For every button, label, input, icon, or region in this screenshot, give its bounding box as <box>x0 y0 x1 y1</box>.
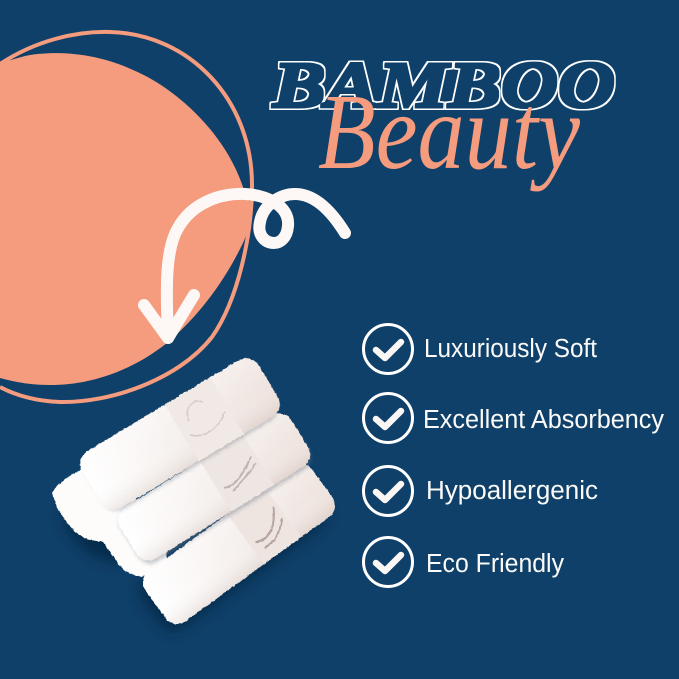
title: Beauty: Beauty <box>318 73 580 192</box>
looping arrow pointing to towels <box>144 194 345 338</box>
benefit: Hypoallergenic: Hypoallergenic <box>426 477 598 505</box>
benefit: Luxuriously Soft <box>364 324 597 374</box>
middle towel <box>112 408 316 566</box>
benefit: Excellent Absorbency <box>364 394 664 442</box>
benefit list <box>364 324 664 586</box>
title: BAMBOO: BAMBOO <box>272 49 615 122</box>
towel shadow <box>51 469 332 637</box>
benefit: Eco Friendly <box>364 538 564 586</box>
peach circle outline <box>0 32 252 402</box>
benefit: Eco Friendly: Eco Friendly <box>426 550 564 578</box>
top towel shadow <box>78 356 283 516</box>
bottom towel <box>137 458 341 630</box>
benefit: Excellent Absorbency: Excellent Absorbency <box>423 406 664 434</box>
benefit: Hypoallergenic <box>364 466 598 516</box>
benefit: Luxuriously Soft: Luxuriously Soft <box>424 335 597 363</box>
back towel <box>52 468 170 576</box>
middle towel shadow <box>114 411 316 568</box>
rolled bamboo towels <box>52 353 341 630</box>
filled peach circle <box>0 53 251 385</box>
top towel <box>75 353 285 515</box>
